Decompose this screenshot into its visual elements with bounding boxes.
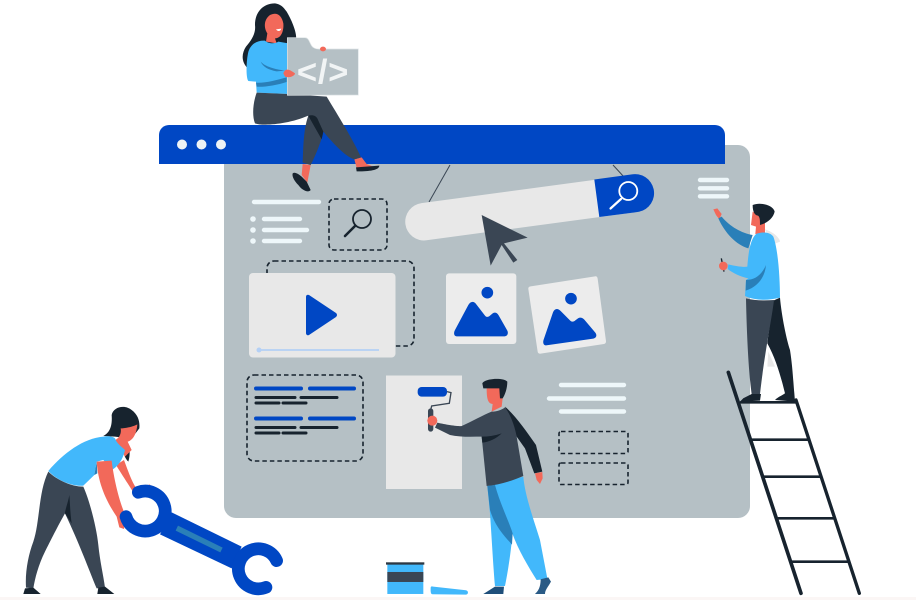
right text lines — [549, 385, 624, 412]
woman with wrench — [23, 407, 277, 594]
painted card — [386, 376, 462, 489]
website panel — [224, 145, 750, 518]
man with paint roller — [418, 379, 551, 594]
dashed text block — [247, 375, 363, 461]
browser top bar — [159, 125, 725, 164]
image card 1 — [446, 273, 516, 344]
ladder — [728, 372, 859, 593]
paint roller — [418, 387, 451, 432]
icon: cursor arrow — [482, 215, 528, 266]
image card 2 — [528, 276, 606, 354]
text list — [250, 202, 319, 244]
search bar — [424, 174, 654, 222]
dashed input 2 — [559, 463, 628, 484]
video player — [249, 261, 414, 358]
icon: dashed magnifier box — [329, 199, 387, 250]
paint stick — [431, 586, 468, 595]
woman with code card — [243, 3, 379, 191]
dashed input 1 — [559, 432, 628, 454]
code symbol: </> — [297, 54, 349, 92]
paint can — [386, 562, 424, 594]
floor line — [0, 597, 916, 600]
man on ladder — [713, 204, 795, 402]
strings holding search bar — [429, 165, 624, 202]
wrench — [126, 491, 277, 589]
menu icon — [700, 180, 727, 196]
